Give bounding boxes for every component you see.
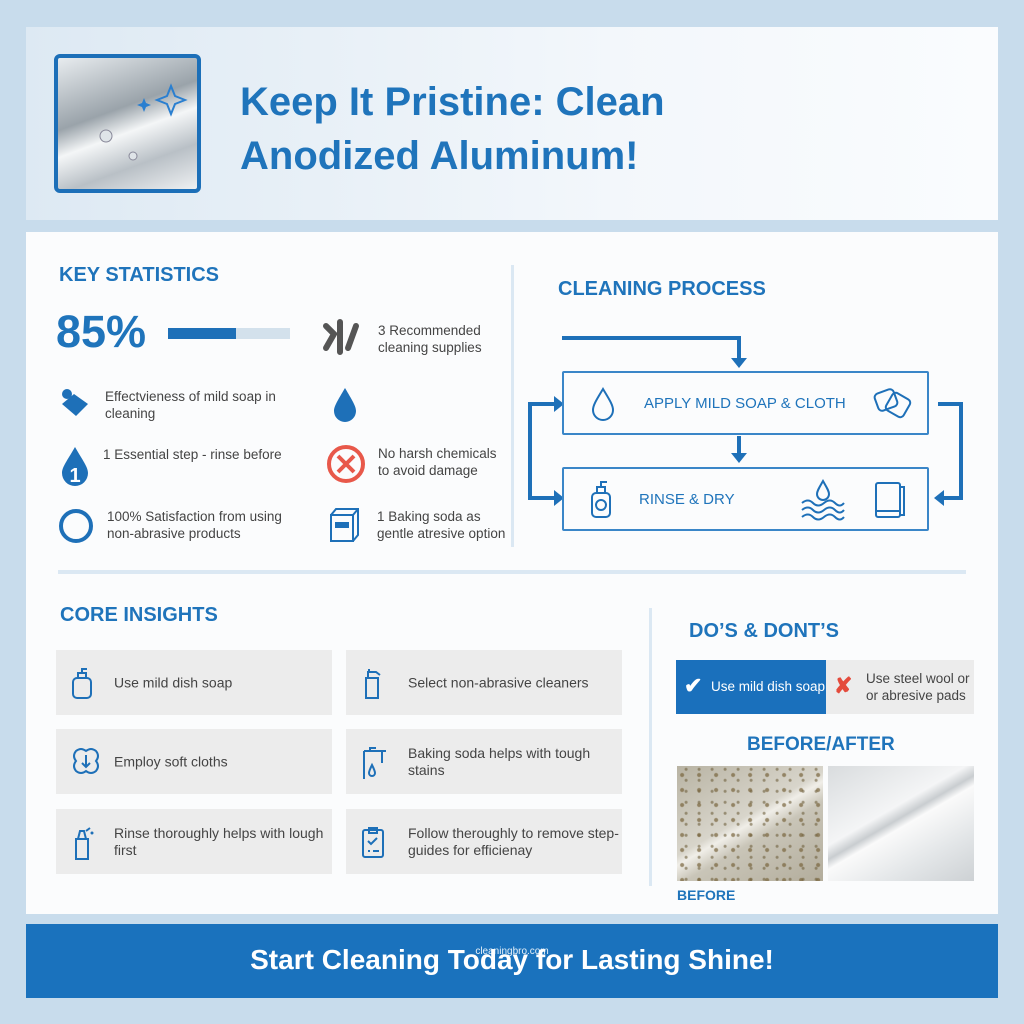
panel: key statistics: 100% Satisfaction from using (107, 509, 282, 524)
don't box: ✘ (834, 673, 852, 698)
heading: KEY STATISTICS (59, 264, 219, 286)
panel: key statistics: Effectvieness of mild soap in (105, 389, 276, 404)
panel: key statistics: 1 Baking soda as (377, 509, 481, 524)
icon: drop with 1: 1 (69, 465, 81, 487)
do box: ✔ (684, 673, 702, 698)
header panel (26, 27, 998, 220)
step 2 box: RINSE & DRY (639, 491, 735, 508)
don't box: Use steel wool or (866, 671, 970, 686)
title: Keep It Pristine: Clean (240, 80, 665, 124)
do box: Use mild dish soap (711, 679, 825, 694)
card: soft cloths: Employ soft cloths (114, 753, 228, 769)
panel: key statistics: cleaning (105, 406, 155, 421)
card: follow guides: guides for efficienay (408, 842, 532, 858)
after image (828, 766, 974, 881)
heading: DO’S & DONT’S (689, 620, 839, 642)
step 2 box (562, 467, 929, 531)
card: mild dish soap (56, 650, 332, 715)
step 1 box: APPLY MILD SOAP & CLOTH (644, 395, 846, 412)
card: rinse: Rinse thoroughly helps with lough (114, 824, 323, 840)
stat text: 3 Recommended (378, 323, 481, 338)
stat text (378, 323, 482, 355)
card: mild dish soap: Use mild dish soap (114, 674, 232, 690)
card: baking soda: stains (408, 762, 445, 778)
panel: key statistics: to avoid damage (378, 463, 478, 478)
panel: key statistics: 1 Essential step - rinse before (103, 447, 282, 462)
card: follow guides: Follow theroughly to remove step- (408, 824, 619, 840)
progress bar (168, 328, 290, 339)
panel: key statistics (56, 264, 505, 543)
big number: 85% (56, 306, 146, 357)
arrows (528, 336, 963, 506)
icon: drop (334, 388, 356, 422)
footer banner (26, 924, 998, 998)
panel: do's and don'ts (676, 620, 974, 714)
icon: no chemicals (327, 445, 365, 483)
panel: key statistics: gentle atresive option (377, 526, 505, 541)
panel: cleaning process (528, 278, 963, 531)
panel: key statistics: No harsh chemicals (378, 446, 497, 461)
card: rinse: first (114, 842, 137, 858)
heading: CLEANING PROCESS (558, 278, 766, 300)
stat text: cleaning supplies (378, 340, 482, 355)
icon: soap (62, 389, 88, 416)
icon: baking soda box (330, 508, 359, 542)
main panel (26, 232, 998, 914)
footer banner: cleaningbro.com (475, 946, 549, 957)
icon: drop with 1 (62, 447, 88, 487)
title: Anodized Aluminum! (240, 134, 638, 178)
heading: BEFORE/AFTER (747, 734, 895, 755)
title (240, 80, 665, 178)
header image (54, 54, 201, 193)
card: baking soda (346, 729, 622, 794)
card: non-abrasive cleaners: Select non-abrasive cleaners (408, 674, 589, 690)
panel: key statistics: non-abrasive products (107, 526, 241, 541)
card: rinse (56, 809, 332, 874)
card: soft cloths (56, 729, 332, 794)
before label: BEFORE (677, 887, 735, 903)
footer banner: Start Cleaning Today for Lasting Shine! (250, 944, 774, 975)
panel: core insights (56, 604, 622, 874)
don't box: or abresive pads (866, 688, 966, 703)
do box (676, 660, 826, 714)
card: non-abrasive cleaners (346, 650, 622, 715)
card: follow guides (346, 809, 622, 874)
step 1 box (562, 371, 929, 435)
card: baking soda: Baking soda helps with tough (408, 744, 590, 760)
don't box (826, 660, 974, 714)
icon: circle (59, 509, 93, 543)
heading: CORE INSIGHTS (60, 604, 218, 626)
panel: before/after (677, 734, 974, 903)
before image (677, 766, 823, 881)
icon: tools (323, 319, 359, 355)
